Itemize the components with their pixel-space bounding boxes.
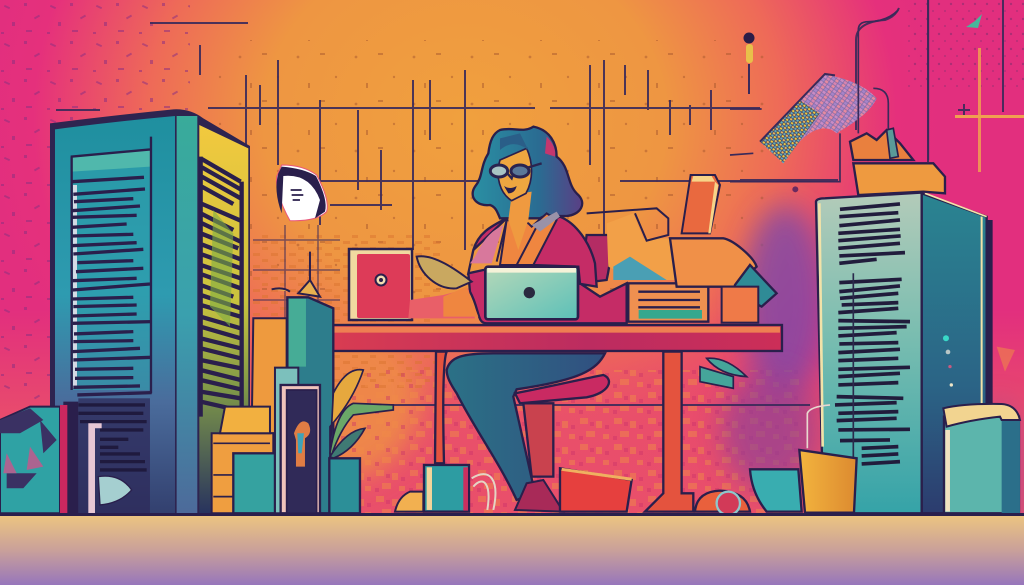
wall-mounted antenna [272, 252, 320, 297]
tablet or leaf held in hand [417, 256, 472, 288]
teal rock at left [0, 407, 60, 513]
floor round object [695, 491, 750, 512]
side vent [201, 157, 242, 417]
server front panel [816, 193, 922, 513]
orange light cross at right [955, 14, 1024, 172]
front vent [71, 137, 152, 395]
vent spine [851, 273, 856, 467]
chair back [580, 235, 610, 283]
upright cylinder [682, 175, 720, 233]
dark lower server block [78, 398, 150, 513]
server case [50, 109, 250, 513]
wall paper note icon [276, 165, 327, 221]
mouth [504, 186, 517, 193]
small dish under desk [700, 358, 747, 388]
antenna tower, boxes and plant [212, 252, 393, 513]
bag and cushion pile [607, 213, 677, 280]
vent lines [835, 204, 910, 464]
right server tower [750, 128, 1020, 513]
green reflection in side vent [210, 210, 233, 327]
plant pot [329, 458, 360, 513]
teal tower [287, 297, 333, 513]
seat post [523, 403, 553, 477]
plant [330, 370, 393, 458]
neck [508, 192, 532, 250]
server front panel [55, 116, 175, 513]
mosaic geometric shape [730, 0, 928, 192]
status lights [943, 335, 953, 387]
desk legs [435, 352, 693, 512]
teal box [233, 453, 275, 513]
teal cup [750, 469, 802, 512]
light blue box [275, 368, 298, 513]
woman, desk and desk items [300, 127, 782, 515]
hair [473, 127, 582, 218]
stool seat [515, 375, 609, 403]
wall pin and wire [744, 32, 754, 94]
floor box left of desk [395, 492, 423, 512]
lower front vent lines [78, 405, 147, 470]
server side panel [922, 193, 987, 513]
storage box on floor [943, 404, 1020, 513]
orange stacked boxes [212, 433, 273, 513]
trousers [447, 353, 605, 500]
jacket [468, 217, 627, 323]
server corner stripe [177, 116, 197, 513]
hair strand over face [500, 133, 528, 150]
red laptop on desk [349, 249, 412, 320]
face [498, 148, 532, 201]
flower pot on server [850, 128, 945, 195]
dark speaker pillar [281, 385, 320, 513]
server back edge [987, 220, 993, 407]
mug on floor [424, 465, 495, 512]
small round device [98, 476, 132, 505]
background grid lines [56, 0, 1003, 405]
stripe tray [628, 283, 708, 322]
back shelf behind tower [252, 318, 287, 433]
left server tower [0, 109, 250, 513]
glasses [490, 163, 542, 178]
server side panel [199, 125, 248, 513]
small stacked box [722, 287, 758, 323]
small wall triangle [997, 347, 1015, 372]
shoe [515, 480, 563, 512]
floor [0, 513, 1024, 585]
silver laptop [485, 267, 578, 319]
floor bag [560, 468, 632, 512]
teal wedge [733, 265, 777, 307]
yellow cup [799, 450, 857, 513]
desk surface [300, 325, 782, 351]
